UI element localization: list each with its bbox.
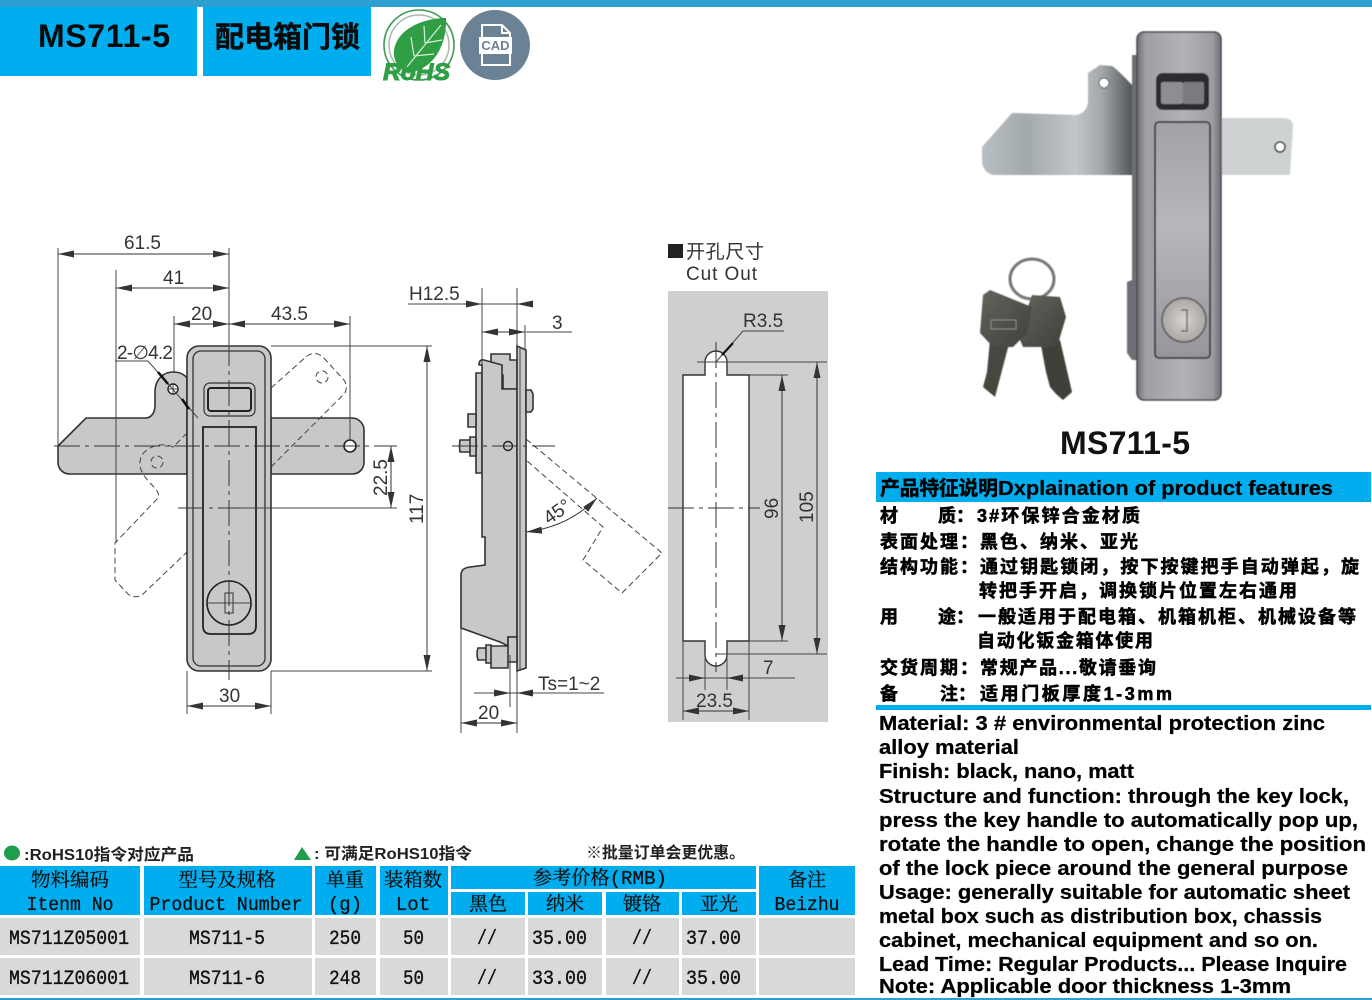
photo: keys (980, 259, 1072, 400)
header: model number (0, 7, 197, 76)
handle panel (1155, 122, 1210, 358)
table row: MS711-6: 33.00 (532, 968, 587, 991)
dimensions: front view (58, 233, 432, 714)
table row: MS711-5: // (632, 928, 652, 951)
table row: MS711-5: 250 (329, 928, 361, 951)
upper bracket (491, 354, 517, 389)
dimensions: front view: 30 (219, 686, 240, 707)
mounting holes (344, 440, 356, 452)
table row: MS711-5: 37.00 (686, 928, 741, 951)
table header: Itenm No (26, 894, 114, 916)
table row: MS711-5 (0, 918, 855, 955)
photo: lock (982, 32, 1293, 400)
table row: MS711-6: 248 (329, 968, 361, 991)
table row: MS711-5: MS711Z05001 (9, 928, 129, 951)
English spec text: Lead Time: Regular Products... Please Inquire (879, 954, 1347, 976)
front key (983, 340, 1010, 397)
table row: MS711-6: MS711-6 (189, 968, 265, 991)
dimensions: front view: 41 (163, 268, 184, 289)
table header: 黑色 (469, 893, 507, 916)
dashed open handle (526, 439, 662, 593)
table: price list (0, 866, 855, 995)
handle window (1156, 73, 1209, 110)
dimensions: side view: H12.5 (409, 284, 460, 305)
table header: 亚光 (700, 893, 738, 916)
English spec text: Material: 3 # environmental protection zinc (879, 713, 1325, 735)
bottom blue bar (0, 998, 1372, 1000)
flange (517, 346, 526, 671)
table header: Product Number (150, 894, 302, 916)
table row: MS711-6 (0, 958, 855, 995)
table header: 型号及规格 (178, 869, 276, 892)
Chinese spec list: 常规产品...敬请垂询 (980, 658, 1156, 678)
pivot (504, 442, 512, 450)
table header: Lot (396, 894, 430, 916)
table header: 备注 (788, 869, 826, 892)
table header: 纳米 (546, 893, 584, 916)
table header (0, 866, 855, 916)
dimensions: front view: 117 (407, 494, 428, 524)
English spec text: Structure and function: through the key lock, (879, 786, 1349, 808)
dimensions: front view: 2-∅4.2 (117, 343, 173, 364)
table header: 装箱数 (384, 869, 442, 892)
drawing: cut out: R3.5 (743, 311, 783, 332)
drawing: side view (452, 346, 662, 671)
table row: MS711-6: MS711Z06001 (9, 968, 129, 991)
English spec text: rotate the handle to open, change the position (879, 834, 1366, 856)
features heading (876, 472, 1371, 502)
dimensions: front view: 61.5 (124, 233, 161, 254)
legend: ※批量订单会更优惠。 (586, 843, 745, 862)
English spec text: metal box such as distribution box, chassis (879, 906, 1322, 928)
cut out heading: Cut Out (686, 264, 758, 285)
Chinese spec list: 质： (938, 505, 974, 526)
header: product name: 配电箱门锁 (215, 21, 360, 54)
latch plate right side (271, 418, 364, 474)
handle knob (526, 390, 533, 412)
cut out opening (683, 351, 749, 666)
table row: MS711-5: // (477, 928, 497, 951)
table header: 镀铬 (623, 893, 661, 916)
lower screw (477, 637, 517, 668)
Chinese spec list: 途： (938, 606, 974, 627)
table row: MS711-5: 50 (403, 928, 424, 951)
header: product name (203, 7, 371, 76)
table header: 参考价格(RMB) (533, 867, 667, 890)
legend: :RoHS10指令对应产品 (24, 845, 194, 864)
table header: Beizhu (774, 894, 840, 916)
table row: MS711-5: MS711-5 (189, 928, 265, 951)
lock cylinder (1162, 298, 1206, 342)
English spec text: of the lock piece around the general purpose (879, 858, 1348, 880)
table row: MS711-6: // (477, 968, 497, 991)
dimensions: side view: Ts=1~2 (538, 674, 600, 695)
Chinese spec list: 一般适用于配电箱、机箱机柜、机械设备等 (978, 606, 1356, 627)
table row: MS711-6: 50 (403, 968, 424, 991)
table header: 单重 (326, 869, 364, 892)
cut out heading (668, 241, 764, 285)
drawing: cut out: 23.5 (696, 691, 733, 712)
legend (4, 843, 745, 864)
latch plate right (1221, 118, 1293, 175)
Chinese spec list: 通过钥匙锁闭，按下按键把手自动弹起，旋 (980, 556, 1359, 577)
Chinese spec list: 交货周期： (880, 657, 978, 678)
top blue bar (0, 0, 1372, 7)
icon: CAD file (460, 10, 530, 80)
latch plate (58, 372, 187, 474)
icon: CAD file: CAD (481, 38, 510, 53)
Chinese spec list: 表面处理： (880, 532, 978, 552)
features heading: Dxplaination of product features (998, 478, 1333, 500)
drawing: front view (54, 340, 397, 680)
Chinese spec list: 自动化钣金箱体使用 (977, 630, 1153, 651)
Chinese spec list: 转把手开启，调换锁片位置左右通用 (979, 580, 1297, 601)
dimensions: front view: 22.5 (371, 459, 392, 496)
English spec text: Finish: black, nano, matt (879, 761, 1134, 783)
handle panel (203, 427, 256, 634)
drawing: cut out: 7 (763, 658, 774, 679)
lock body (187, 346, 271, 671)
English spec text: Note: Applicable door thickness 1-3mm (879, 976, 1291, 998)
Chinese spec list: 注： (940, 684, 976, 704)
dimensions: front view: 43.5 (271, 304, 308, 325)
English spec text: press the key handle to automatically pop up, (879, 810, 1358, 832)
key ring (1010, 259, 1054, 299)
Chinese spec list: 备 (880, 684, 898, 704)
upper screw (460, 437, 476, 456)
icon: RoHS leaf: RoHS (383, 59, 450, 86)
Chinese spec list: 黑色、纳米、亚光 (980, 532, 1138, 552)
left plate (476, 373, 482, 473)
body (1137, 32, 1221, 400)
English spec text: alloy material (879, 737, 1019, 759)
Chinese spec list: 用 (880, 607, 898, 627)
dimensions: side view (408, 284, 604, 733)
Chinese spec list: 结构功能： (880, 557, 978, 577)
icon: RoHS leaf (383, 10, 454, 86)
panel: product features (876, 472, 1371, 998)
features heading: 产品特征说明 (880, 477, 998, 500)
table header: (g) (328, 894, 362, 916)
handle window (204, 383, 255, 416)
drawing: cut out: 105 (797, 491, 818, 523)
drawing: cut out (668, 291, 828, 722)
centre lines (54, 445, 397, 447)
header: model number: MS711-5 (38, 18, 170, 54)
latch plate left (982, 65, 1132, 175)
cut out heading: 开孔尺寸 (686, 241, 764, 263)
Chinese spec list: 适用门板厚度1-3mm (980, 684, 1172, 704)
dashed rotated handle (115, 354, 346, 597)
English spec text: cabinet, mechanical equipment and so on. (879, 930, 1318, 952)
English spec text (879, 713, 1366, 998)
product title: MS711-5 (1060, 425, 1190, 461)
dimensions: side view: 20 (478, 703, 499, 724)
Chinese spec list: 材 (880, 506, 898, 526)
dimensions: side view: 3 (552, 313, 563, 334)
main body (461, 360, 517, 646)
table row: MS711-5: 35.00 (532, 928, 587, 951)
dimensions: front view: 20 (191, 304, 212, 325)
key cylinder (207, 581, 251, 625)
dimensions: side view: 45° (540, 495, 575, 529)
drawing: cut out: 96 (762, 498, 783, 519)
legend: : 可满足RoHS10指令 (314, 844, 472, 863)
Chinese spec list (880, 505, 1359, 704)
Chinese spec list: 3#环保锌合金材质 (977, 505, 1140, 526)
table row: MS711-6: 35.00 (686, 968, 741, 991)
rear housing (1127, 55, 1140, 360)
table header: 物料编码 (31, 869, 109, 892)
English spec text: Usage: generally suitable for automatic sheet (879, 882, 1350, 904)
table row: MS711-6: // (632, 968, 652, 991)
rear key (1040, 340, 1072, 400)
